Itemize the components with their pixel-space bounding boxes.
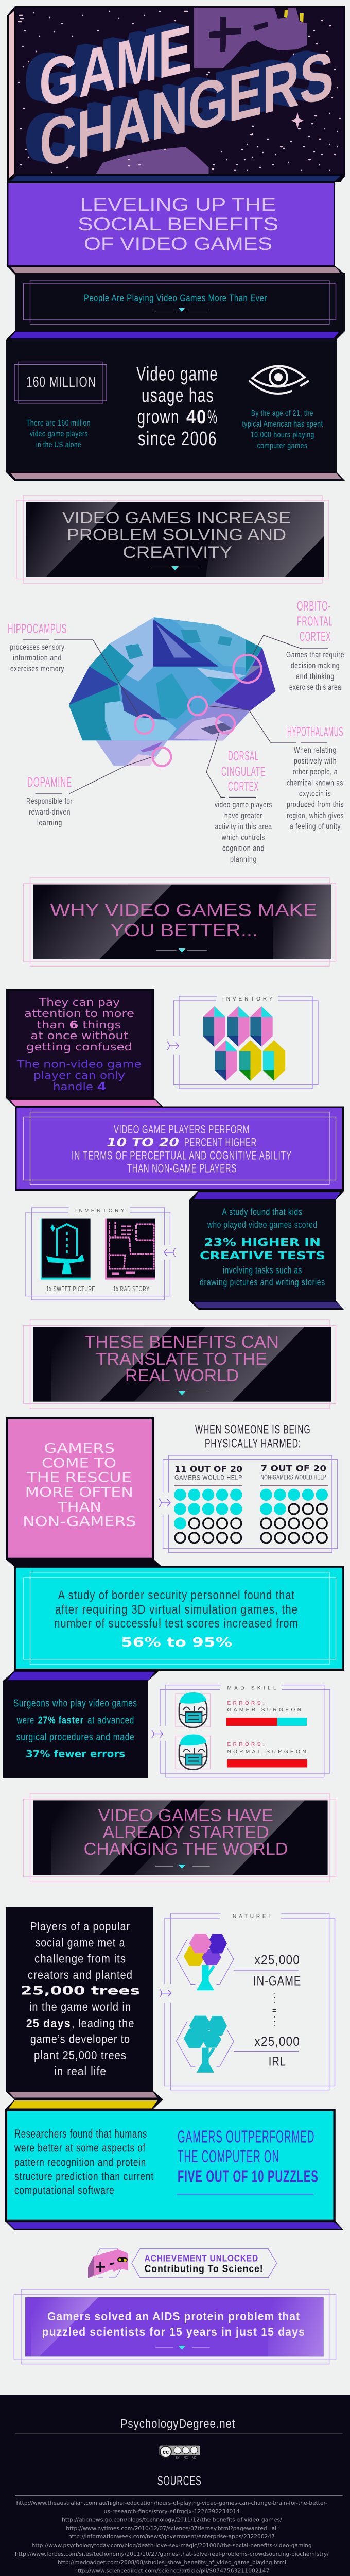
panel: border security: 56% to 95% <box>121 1635 232 1650</box>
icon: story map <box>105 1219 155 1280</box>
icon: eye <box>250 366 308 394</box>
panel: surgeons: were <box>16 1715 34 1726</box>
panel: gamers come to the rescue: THAN <box>57 1500 101 1515</box>
panel: border security: after requiring 3D virtual simulation games, the <box>55 1603 298 1617</box>
stat: usage growth: since 2006 <box>138 428 217 450</box>
panel: protein structure: Researchers found that humans <box>14 2127 147 2140</box>
panel: 25,000 trees: in real life <box>54 2064 107 2078</box>
stat: usage growth: usage has <box>142 385 214 406</box>
inventory: crystals: INVENTORY <box>222 996 273 1002</box>
chart: nature trees: IRL <box>269 2055 286 2069</box>
icon: real tree <box>177 2016 234 2073</box>
badge: achievement unlocked <box>132 2249 277 2278</box>
panel: attention: player can only <box>33 1069 125 1081</box>
icon: controller achievement <box>88 2249 128 2278</box>
panel: 25,000 trees: plant 25,000 trees <box>34 2048 127 2062</box>
heading: real world <box>24 1320 336 1409</box>
chart: gamers <box>174 1464 242 1543</box>
heading: AIDS protein: Gamers solved an AIDS protein problem that <box>47 2310 300 2323</box>
heading: real world: REAL WORLD <box>125 1366 239 1385</box>
panel: attention: things <box>82 1019 121 1031</box>
panel: border security: A study of border security personnel found that <box>58 1588 295 1602</box>
panel: protein structure: computational software <box>14 2184 114 2197</box>
brain callout rings and leader lines <box>23 635 328 798</box>
sources: http://www.forbes.com/sites/techonomy/2011/10/27/games-that-solve-real-problems-crowdsourcing-biochemistry/ <box>15 2551 329 2557</box>
icon: creative commons badge: cc <box>163 2449 169 2455</box>
bar: normal surgeon: ERRORS: <box>227 1742 265 1748</box>
band: purple <box>3 1671 159 1681</box>
sources: us-research-finds/story-e6frgcjx-1226292234014 <box>104 2509 240 2515</box>
label: hippocampus: processes sensory <box>10 643 65 652</box>
panel: 25,000 trees: social game met a <box>35 1936 126 1950</box>
panel: 25,000 trees: in the game world in <box>29 2000 131 2013</box>
panel: 10 to 20 percent: 10 TO 20 <box>107 1136 179 1149</box>
heading: real world: THESE BENEFITS CAN <box>84 1332 279 1351</box>
label: orbitofrontal cortex <box>286 598 344 692</box>
panel: 25,000 trees <box>6 1907 153 2091</box>
title panel: space background <box>7 6 345 182</box>
sources: SOURCES <box>157 2473 202 2488</box>
label: hypothalamus: positively with <box>294 757 337 766</box>
stat: 10,000 hours <box>242 409 323 450</box>
label: hippocampus <box>8 621 67 673</box>
heading: physically harmed: PHYSICALLY HARMED: <box>205 1436 301 1451</box>
label: dorsal cingulate cortex: planning <box>230 855 257 864</box>
panel: 10 to 20 percent: VIDEO GAME PLAYERS PERFORM <box>114 1123 250 1136</box>
panel: subtitle: LEVELING UP THE <box>80 195 276 215</box>
subtitle band <box>7 266 345 275</box>
heading: why video games make you better: YOU BETTER... <box>111 921 258 940</box>
chart: gamers: GAMERS WOULD HELP <box>174 1473 242 1482</box>
panel: creative tests: who played video games scored <box>207 1219 318 1230</box>
panel: creative tests: A study found that kids <box>222 1207 303 1217</box>
heading: AIDS protein <box>14 2289 336 2364</box>
chart: nature trees: = <box>272 2006 277 2014</box>
panel: 10 to 20 percent <box>15 1107 344 1191</box>
panel: stats <box>6 340 337 472</box>
panel: creative tests <box>189 1200 336 1301</box>
panel: gamers come to the rescue: MORE OFTEN <box>25 1485 133 1500</box>
icon: pink crystal 1 <box>203 1006 225 1047</box>
heading: problem solving: VIDEO GAMES INCREASE <box>62 509 291 527</box>
panel: border security <box>14 1566 344 1671</box>
label: hypothalamus: When relating <box>294 746 337 755</box>
heading: physically harmed <box>195 1423 311 1451</box>
bar: gamer surgeon <box>226 1701 307 1726</box>
panel: attention: 4 <box>97 1080 107 1093</box>
stat: usage growth: grown <box>137 406 180 428</box>
stat: usage growth <box>136 364 218 450</box>
panel: 25,000 trees: challenge from its <box>34 1952 126 1965</box>
icon: sword picture <box>41 1219 91 1280</box>
panel: protein structure: pattern recognition and protein <box>14 2156 146 2168</box>
heading: problem solving: PROBLEM SOLVING AND <box>67 526 286 544</box>
panel: people are playing <box>15 273 345 331</box>
inventory: picture and story: 1x RAD STORY <box>113 1285 149 1293</box>
inventory: picture and story: 1x SWEET PICTURE <box>46 1285 95 1293</box>
panel: surgeons: Surgeons who play video games <box>13 1698 137 1709</box>
icon: surgeon face <box>176 1692 210 1727</box>
panel: attention: They can pay <box>39 996 120 1008</box>
panel: surgeons <box>3 1681 148 1778</box>
label: dopamine: learning <box>37 819 62 827</box>
stat: usage growth: 40 <box>186 406 207 428</box>
panel: attention: 6 <box>69 1019 78 1031</box>
label: dorsal cingulate cortex: CORTEX <box>228 778 259 794</box>
icon: creative commons badge: NC <box>184 2456 188 2460</box>
band: pink <box>6 1098 163 1107</box>
chart: nature trees <box>160 1913 335 2090</box>
stat: 10,000 hours: By the age of 21, the <box>251 409 313 418</box>
panel: 10 to 20 percent: THAN NON-GAME PLAYERS <box>127 1162 237 1175</box>
bar: gamer surgeon: ERRORS: <box>227 1701 265 1706</box>
label: hippocampus: information and <box>13 654 62 663</box>
icon: pink crystal 4 <box>215 1040 237 1081</box>
label: dopamine: Responsible for <box>26 797 73 806</box>
panel: attention <box>6 989 154 1098</box>
icon: pink crystal 3 <box>250 1006 273 1047</box>
stat: 160 million: video game players <box>30 430 88 438</box>
panel: subtitle: OF VIDEO GAMES <box>84 234 272 254</box>
panel: surgeons: 27% faster <box>38 1715 84 1726</box>
stat: 160 million: There are 160 million <box>26 419 91 428</box>
heading: problem solving <box>16 496 329 583</box>
heading: AIDS protein: puzzled scientists for 15 years in just 15 days <box>42 2325 305 2338</box>
icon: creative commons badge: BY <box>176 2456 180 2460</box>
panel: 25,000 trees: Players of a popular <box>30 1920 130 1933</box>
panel: attention: getting confused <box>26 1041 132 1053</box>
panel: 10 to 20 percent: PERCENT HIGHER <box>184 1136 257 1149</box>
panel: attention: attention to more <box>24 1007 134 1020</box>
panel: surgeons: at advanced <box>87 1715 134 1726</box>
stat: usage growth: % <box>207 406 218 428</box>
panel: protein structure: structure prediction than current <box>14 2170 154 2182</box>
band: deep purple <box>189 1191 344 1200</box>
label: dorsal cingulate cortex: have greater <box>224 811 262 820</box>
heading: changing the world: VIDEO GAMES HAVE <box>98 1806 273 1825</box>
panel: gamers come to the rescue: NON-GAMERS <box>23 1514 136 1530</box>
panel: surgeons: surgical procedures and made <box>16 1732 135 1743</box>
panel: 25,000 trees: game’s developer to <box>30 2032 130 2045</box>
stat: 10,000 hours: computer games <box>257 442 308 450</box>
panel: attention: handle <box>53 1080 93 1093</box>
panel: attention: at once without <box>30 1029 129 1042</box>
sources: http://www.theaustralian.com.au/higher-education/hours-of-playing-video-games-can-change-brain-for-the-better- <box>16 2500 327 2506</box>
inventory: crystals <box>167 996 318 1089</box>
label: dorsal cingulate cortex: video game players <box>215 801 272 809</box>
panel: gamers come to the rescue: GAMERS <box>44 1441 115 1456</box>
panel: gamers come to the rescue: COME TO <box>42 1456 116 1471</box>
text: GAME <box>39 11 192 122</box>
panel: attention: than <box>37 1019 65 1031</box>
chart: nature trees: NATURE! <box>233 1913 270 1920</box>
title bottom band <box>7 174 344 182</box>
panel: 25,000 trees: creators and planted <box>28 1968 133 1981</box>
sources: http://www.psychologytoday.com/blog/death-love-sex-magic/201006/the-social-benefits-video-gaming <box>32 2543 312 2549</box>
panel: subtitle: SOCIAL BENEFITS <box>78 214 278 234</box>
brain graphic <box>67 616 279 768</box>
label: hypothalamus: oxytocin is <box>299 790 331 799</box>
chart: non-gamers <box>260 1463 328 1543</box>
stat: 160 million <box>14 362 107 449</box>
stat: usage growth: Video game <box>136 364 218 385</box>
panel: border security: number of successful test scores increased from <box>54 1617 299 1631</box>
panel: creative tests: CREATIVE TESTS <box>200 1249 325 1262</box>
sources <box>15 2473 343 2574</box>
chart: nature trees: x25,000 <box>254 1953 300 1967</box>
heading: changing the world: ALREADY STARTED <box>103 1823 269 1841</box>
bar: normal surgeon <box>227 1742 307 1767</box>
icon: in-game tree <box>177 1934 234 1990</box>
panel: attention: The non-video game <box>16 1058 142 1071</box>
panel: 25,000 trees: , leading the <box>72 2016 135 2030</box>
stats band <box>6 472 345 481</box>
inventory: picture and story <box>26 1208 176 1300</box>
icon: creative commons badge: ND <box>192 2456 196 2460</box>
label: dorsal cingulate cortex: activity in this area <box>215 822 272 832</box>
heading: changing the world <box>24 1793 336 1882</box>
label: dopamine <box>26 774 73 827</box>
chart: mad skill errors: MAD SKILL <box>227 1685 276 1691</box>
stat: 10,000 hours: 10,000 hours playing <box>251 431 314 439</box>
sources: http://medgadget.com/2008/08/studies_show_benefits_of_video_game_playing.html <box>58 2560 286 2566</box>
label: dorsal cingulate cortex: CINGULATE <box>221 764 266 779</box>
icon: surgeon face <box>176 1734 210 1769</box>
panel: creative tests: 23% HIGHER IN <box>204 1236 321 1248</box>
label: hippocampus: exercises memory <box>10 665 64 673</box>
icon: yellow crystal 1 <box>239 1040 261 1081</box>
chart: non-gamers: 7 OUT OF 20 <box>260 1463 326 1473</box>
icon: yellow crystal 2 <box>263 1040 285 1081</box>
panel: creative tests: involving tasks such as <box>223 1265 302 1276</box>
sources: http://abcnews.go.com/blogs/technology/2011/12/the-benefits-of-video-games/ <box>62 2517 282 2523</box>
panel: protein structure <box>5 2109 336 2222</box>
band: purple <box>6 331 345 340</box>
chart: mad skill errors <box>152 1685 330 1777</box>
heading: problem solving: CREATIVITY <box>122 543 232 562</box>
badge: achievement unlocked: ACHIEVEMENT UNLOCKED <box>145 2253 258 2264</box>
icon: creative commons badge <box>160 2446 200 2460</box>
heading: real world: TRANSLATE TO THE <box>96 1349 267 1368</box>
panel: 25,000 trees: 25 days <box>26 2016 71 2030</box>
panel: subtitle <box>7 182 335 267</box>
panel: surgeons: 37% fewer errors <box>26 1749 125 1760</box>
heading: changing the world: CHANGING THE WORLD <box>84 1839 288 1858</box>
sources: http://www.nytimes.com/2010/12/07/science/07tierney.html?pagewanted=all <box>66 2526 278 2532</box>
bands: mauve and yellow <box>5 2091 163 2109</box>
stat: 160 million: 160 MILLION <box>26 374 96 391</box>
band: black <box>6 1560 163 1567</box>
band: dark purple <box>189 1301 344 1310</box>
chart: gamers vs non-gamers dots <box>159 1455 338 1552</box>
panel: gamers come to the rescue <box>6 1417 154 1560</box>
chart: gamers: 11 OUT OF 20 <box>174 1464 242 1474</box>
panel: people are playing: People Are Playing Video Games More Than Ever <box>84 293 267 304</box>
sources: http://informationweek.com/news/government/enterprise-apps/232200247 <box>68 2534 275 2540</box>
label: orbitofrontal cortex: and thinking <box>296 672 335 681</box>
label: dopamine: reward-driven <box>29 808 71 817</box>
inventory: picture and story: INVENTORY <box>75 1208 125 1214</box>
panel: gamers come to the rescue: THE RESCUE <box>26 1470 132 1486</box>
label: dorsal cingulate cortex: cognition and <box>222 844 265 853</box>
icon: pink crystal 2 <box>227 1006 250 1047</box>
chart: nature trees: IN-GAME <box>253 1974 301 1989</box>
stat: 160 million: in the US alone <box>36 440 81 449</box>
band: purple <box>5 2221 344 2230</box>
label: dorsal cingulate cortex: which controls <box>221 834 265 842</box>
badge: achievement unlocked: Contributing To Science! <box>145 2264 264 2275</box>
label: hippocampus: HIPPOCAMPUS <box>8 621 67 636</box>
label: hypothalamus <box>287 724 344 831</box>
heading: why video games make you better: WHY VIDEO GAMES MAKE <box>50 901 317 920</box>
chart: nature trees: x25,000 <box>254 2035 300 2049</box>
heading: why video games make you better <box>24 878 336 966</box>
footer brand: PsychologyDegree.net <box>120 2417 236 2430</box>
text: CHANGERS <box>40 37 334 181</box>
stat: 10,000 hours: typical American has spent <box>242 420 323 429</box>
panel: protein structure: were better at some aspects of <box>14 2142 146 2155</box>
label: dopamine: DOPAMINE <box>27 774 72 790</box>
panel: 25,000 trees: 25,000 trees <box>21 1985 140 1998</box>
bar: gamer surgeon: GAMER SURGEON <box>227 1707 302 1713</box>
footer <box>0 2395 350 2576</box>
bar: normal surgeon: NORMAL SURGEON <box>227 1749 306 1755</box>
sources: http://www.sciencedirect.com/science/article/pii/S0747563211002147 <box>74 2568 269 2574</box>
label: dorsal cingulate cortex <box>215 748 272 864</box>
label: dorsal cingulate cortex: DORSAL <box>228 748 259 764</box>
